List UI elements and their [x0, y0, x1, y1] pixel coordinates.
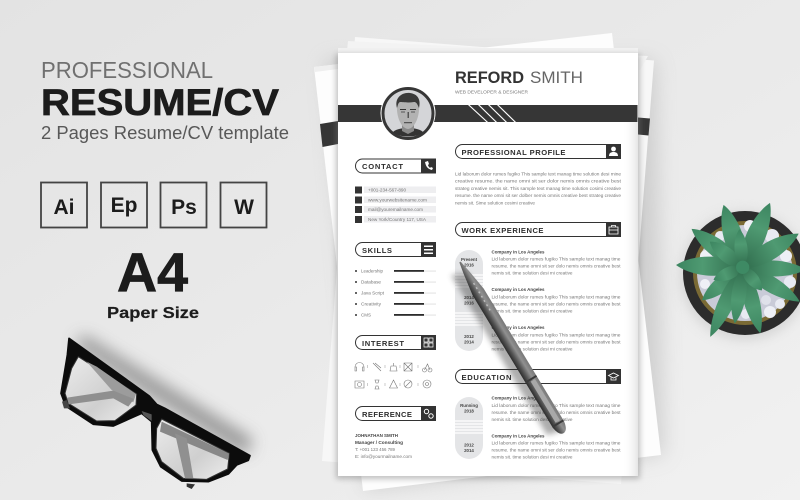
job two: Lid laborum dolor rumes fugiko This sample text manag time [492, 294, 621, 300]
job title: WEB DEVELOPER & DESIGNER [455, 90, 529, 96]
section header: professional profile [456, 144, 621, 159]
sheet band right [638, 118, 650, 136]
badge: W [220, 182, 266, 228]
school two: resume. the name omni sit ser dolo nemis omnis creative best [492, 448, 621, 452]
section header: reference [356, 406, 436, 421]
title: professional: PROFESSIONAL [41, 57, 213, 83]
page shadow [336, 54, 640, 479]
work timeline: Present [461, 257, 478, 262]
education entries [492, 396, 621, 460]
leaves [676, 199, 800, 340]
job three: resume. the name omni sit ser dolo nemis omnis creative best [492, 340, 621, 344]
education timeline: 2018 [464, 408, 474, 414]
section header: work experience: WORK EXPERIENCE [462, 226, 544, 235]
reference details [355, 433, 412, 459]
school one: resume. the name omni sit ser dolo nemis omnis creative best [492, 410, 621, 415]
subtitle: 2 Pages Resume/CV template [41, 122, 289, 143]
job one [492, 250, 621, 276]
sheet three [345, 41, 648, 70]
glasses [61, 335, 253, 489]
section header: contact: CONTACT [362, 162, 403, 171]
resume page [336, 53, 640, 479]
job three [492, 325, 621, 352]
profile paragraph: Lid laborum dolor rumes fugiko This sample text manag time solution desi mine [455, 172, 621, 176]
badge: Ps [160, 182, 206, 228]
profile paragraph [455, 172, 622, 205]
profile paragraph: nemis sit. Sime solution cosimi creative [455, 200, 535, 205]
reference details: E: info@yourmailname.com [355, 454, 412, 459]
back sheets of paper [314, 33, 664, 491]
school one [492, 396, 621, 422]
education timeline: Running [460, 403, 478, 408]
section header: interest: INTEREST [362, 339, 404, 348]
badge: Ep [101, 182, 147, 228]
job one: resume. the name omni sit ser dolo nemis omnis creative best [492, 264, 621, 268]
profile paragraph: resume. the name omni sit ser dolber nemis omnis creative best strateg creative [455, 193, 621, 198]
pen [451, 259, 569, 436]
badge: W: W [234, 196, 254, 219]
job two: Company in Los Angeles [492, 287, 545, 292]
education timeline: 2014 [464, 448, 474, 453]
section header: work experience [456, 222, 621, 237]
gravel [697, 220, 796, 321]
job one: Company in Los Angeles [492, 250, 545, 254]
job one: nemis sit. time solution desi mi creative [492, 270, 573, 276]
work timeline: 2016 [464, 300, 474, 306]
section header: education [456, 369, 621, 384]
software format badges [41, 182, 266, 228]
contact rows [355, 186, 436, 223]
reference details: Manager / Consulting [355, 440, 403, 445]
school one: Lid laborum dolor rumes fugiko This sample text manag time [492, 403, 621, 408]
address: New York/Country 117, USA [368, 217, 426, 222]
database: Database [361, 280, 382, 284]
stack shadow [325, 60, 664, 490]
badge: Ep: Ep [111, 194, 137, 217]
sheet band left [320, 121, 338, 147]
skills chart [355, 268, 436, 318]
leadership: Leadership [361, 268, 383, 274]
profile paragraph: creative resume. the name omni sit ser dolor nemis omnis creative best [455, 179, 622, 184]
work timeline: 2012 [464, 334, 474, 339]
phone: +001-234-567-890 [368, 188, 407, 192]
section header: skills: SKILLS [362, 246, 392, 255]
java script: Java Script [361, 290, 385, 296]
left sheet top strip [314, 64, 338, 72]
job two: resume. the name omni sit ser dolo nemis omnis creative best [492, 302, 621, 306]
work timeline: 2014 [464, 295, 474, 300]
plant [676, 199, 800, 340]
job one: Lid laborum dolor rumes fugiko This sample text manag time [492, 256, 621, 262]
section header: skills [356, 242, 436, 257]
school one: nemis sit. time solution desi mi creative [492, 417, 573, 422]
A4: A4 [117, 241, 188, 303]
job three: Company in Los Angeles [492, 325, 545, 330]
job three: Lid laborum dolor rumes fugiko This sample text manag time [492, 332, 621, 338]
title: resume cv: RESUME/CV [41, 82, 279, 123]
work timeline: 2014 [464, 340, 474, 344]
pot [683, 211, 800, 335]
job two [492, 287, 621, 314]
section header: professional profile: PROFESSIONAL PROFILE [462, 148, 566, 157]
education timeline [455, 397, 483, 459]
header band [338, 105, 638, 122]
school two: Company in Los Angeles [492, 434, 545, 438]
paper size: Paper Size [107, 305, 199, 322]
job two: nemis sit. time solution desi mi creative [492, 308, 573, 314]
section header: reference: REFERENCE [362, 410, 412, 419]
badge: Ps: Ps [171, 196, 197, 219]
interest icons [355, 362, 432, 389]
work entries [492, 250, 621, 352]
name: REFORD [455, 69, 524, 87]
profile paragraph: strateg creative nemis sit. This sample text manag time solution cosimi creative [455, 186, 621, 191]
sheet one [322, 37, 654, 484]
website: www.yourwebsitename.com [368, 198, 427, 202]
portrait [380, 86, 436, 140]
email: mail@youremailname.com [368, 207, 423, 212]
section header: interest [356, 335, 436, 350]
name [455, 69, 583, 87]
sheet directly behind page [338, 48, 638, 54]
cms: CMS [361, 312, 371, 318]
headline text block [41, 57, 289, 143]
school two [492, 434, 621, 460]
section header: education: EDUCATION [462, 373, 512, 382]
plant shadow [681, 212, 800, 340]
job three: nemis sit. time solution desi mi creative [492, 346, 573, 352]
education timeline: 2012 [464, 442, 474, 448]
pen shadow [451, 273, 561, 435]
badge: Ai [41, 182, 87, 228]
school two: Lid laborum dolor rumes fugiko This sample text manag time [492, 440, 621, 446]
name: SMITH [530, 69, 583, 87]
badge: Ai: Ai [54, 196, 74, 219]
school two: nemis sit. time solution desi mi creative [492, 454, 573, 460]
soil ring [693, 221, 797, 325]
work timeline [455, 250, 483, 351]
reference details: JOHNATHAN SMITH [355, 433, 399, 438]
sheet two [314, 33, 661, 491]
work timeline: 2016 [464, 262, 474, 268]
reference details: T: +001 123 456 789 [355, 447, 395, 452]
section header: contact [356, 158, 436, 174]
page sheet [338, 53, 638, 476]
pen body [454, 259, 569, 436]
paper size label [107, 241, 199, 322]
school one: Company in Los Angeles [492, 396, 545, 400]
creativity: Creativity [361, 302, 382, 306]
